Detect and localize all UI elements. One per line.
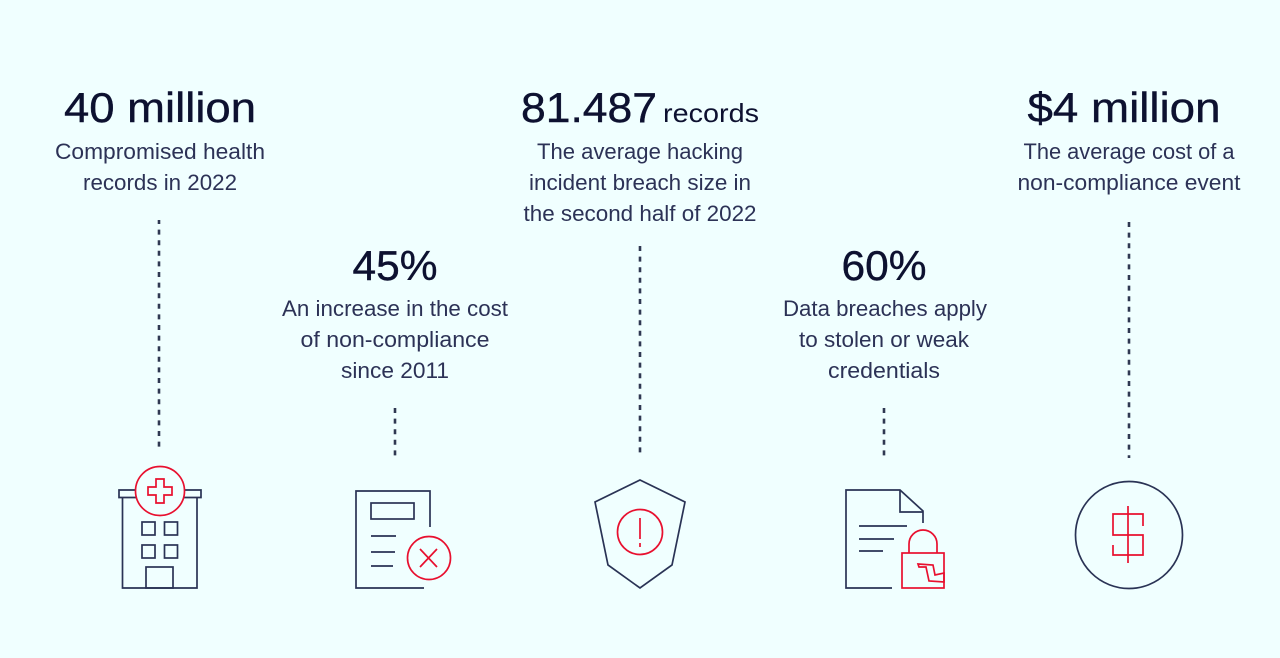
description: data breaches credentials bbox=[783, 296, 987, 383]
description: cost of non-compliance increase: since 2011 bbox=[341, 358, 449, 383]
column: $4 million bbox=[1018, 84, 1240, 588]
description: data breaches credentials: to stolen or weak bbox=[799, 327, 970, 352]
description: average hacking incident bbox=[524, 139, 756, 226]
description: average cost of non-compliance bbox=[1018, 139, 1240, 195]
column: 60% bbox=[783, 242, 987, 588]
stat: 60%: 60% bbox=[842, 242, 926, 289]
stat: 81.487 records: records bbox=[663, 98, 759, 128]
description: average cost of non-compliance: non-compliance event bbox=[1018, 170, 1240, 195]
column: 45% bbox=[282, 242, 508, 588]
stat: 40 million: 40 million bbox=[64, 84, 256, 131]
icon: document with padlock bbox=[846, 490, 944, 588]
column: 81.487 records bbox=[521, 84, 759, 588]
description: compromised health records bbox=[55, 139, 265, 195]
dotted connector bbox=[394, 408, 396, 458]
icon: hospital bbox=[119, 466, 201, 588]
dotted connector bbox=[1128, 222, 1130, 458]
stat: 81.487 records bbox=[521, 84, 759, 131]
icon: document with cross bbox=[356, 491, 450, 588]
description: cost of non-compliance increase: of non-compliance bbox=[300, 327, 490, 352]
dotted connector bbox=[158, 220, 160, 448]
description: data breaches credentials: Data breaches apply bbox=[783, 296, 987, 321]
description: average cost of non-compliance: The average cost of a bbox=[1024, 139, 1235, 164]
description: cost of non-compliance increase: An increase in the cost bbox=[282, 296, 508, 321]
description: average hacking incident: The average hacking bbox=[537, 139, 743, 164]
description: data breaches credentials: credentials bbox=[828, 358, 940, 383]
description: average hacking incident: the second half of 2022 bbox=[524, 201, 756, 226]
description: compromised health records: Compromised health bbox=[55, 139, 265, 164]
icon: shield with alert bbox=[595, 480, 685, 588]
column: 40 million bbox=[55, 84, 265, 588]
dotted connector bbox=[883, 408, 885, 458]
dotted connector bbox=[639, 246, 641, 458]
icon: dollar in circle bbox=[1076, 482, 1182, 588]
stat: $4 million: $4 million bbox=[1028, 84, 1220, 131]
description: cost of non-compliance increase bbox=[282, 296, 508, 383]
stat: 45%: 45% bbox=[352, 242, 438, 289]
description: compromised health records: records in 2022 bbox=[83, 170, 237, 195]
stat: 81.487 records: 81.487 bbox=[521, 84, 657, 131]
description: average hacking incident: incident breach size in bbox=[529, 170, 751, 195]
